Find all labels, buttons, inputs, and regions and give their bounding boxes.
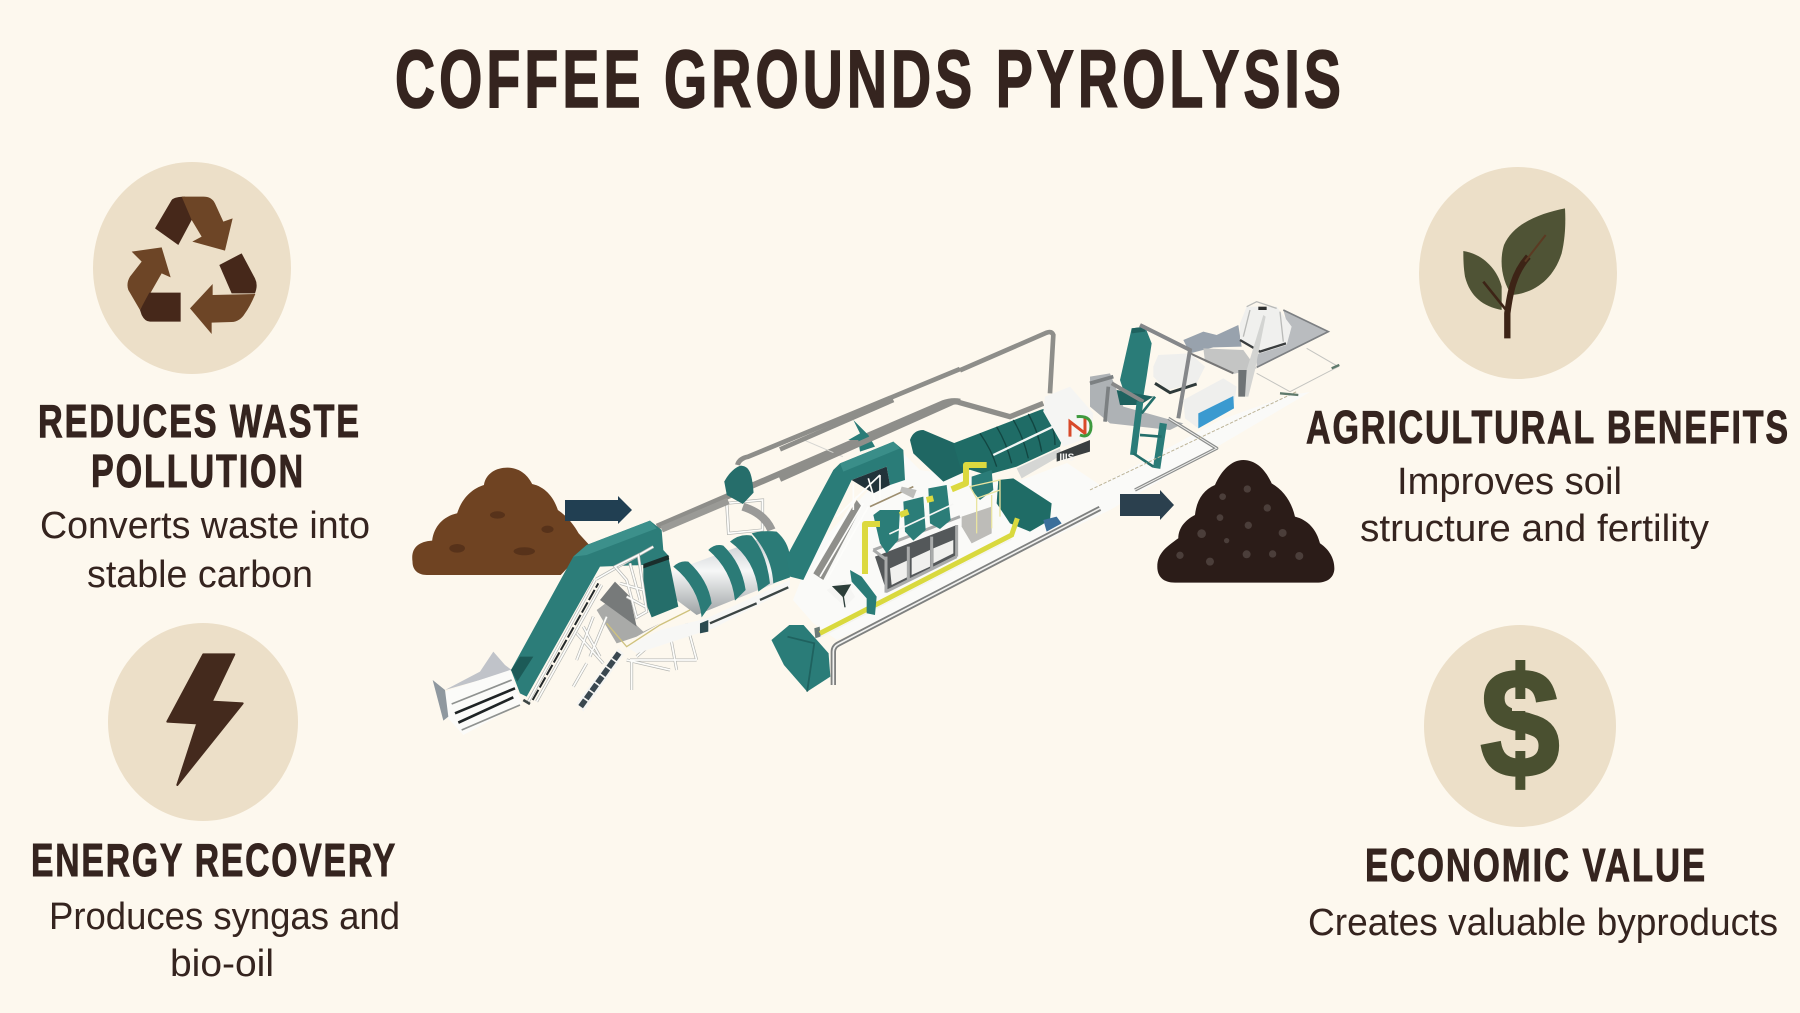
text block: Produces syngas and — [49, 896, 400, 938]
icon: recycle — [93, 162, 291, 374]
text block: Creates valuable byproducts — [1308, 902, 1778, 944]
text block: Converts waste into — [40, 505, 370, 547]
plant floor — [793, 392, 1310, 640]
text block — [40, 505, 370, 596]
right section: scrubber tower, silo, storage — [1090, 302, 1339, 490]
title: COFFEE GROUNDS PYROLYSIS — [395, 34, 1345, 125]
heading: POLLUTION — [91, 445, 305, 497]
text block: Improves soil — [1397, 461, 1622, 503]
dryer end box and upper pipe — [960, 332, 1093, 464]
chart: pyrolysis plant machinery — [433, 302, 1339, 735]
text block: structure and fertility — [1360, 508, 1709, 550]
stock hopper — [433, 652, 522, 735]
text block: bio-oil — [170, 943, 274, 985]
dryer end box and upper pipe: IIIS — [1059, 453, 1075, 464]
icon: raw coffee grounds pile — [412, 468, 589, 575]
panel: economic value — [1308, 625, 1778, 944]
centre section: reactor, filters, pipes — [780, 400, 1100, 685]
panel: reduces waste pollution — [38, 162, 370, 596]
icon: dollar sign: $ — [1480, 637, 1560, 811]
heading: REDUCES WASTE — [38, 395, 361, 447]
left section: feed conveyor and rotary drum — [433, 501, 790, 735]
panel: agricultural benefits — [1306, 167, 1790, 550]
arrow: input — [565, 496, 632, 524]
icon: biochar pile — [1157, 460, 1334, 583]
icon: leaf sprout — [1419, 167, 1617, 379]
heading — [38, 395, 361, 497]
text block: stable carbon — [87, 554, 313, 596]
icon: dollar sign — [1424, 625, 1616, 827]
heading: ENERGY RECOVERY — [31, 834, 397, 886]
arrow: output — [1120, 490, 1174, 520]
icon: lightning bolt — [108, 623, 298, 821]
pipes and cyclone — [657, 369, 960, 692]
panel: energy recovery — [31, 623, 400, 985]
text block — [49, 896, 400, 985]
text block — [1360, 461, 1709, 550]
